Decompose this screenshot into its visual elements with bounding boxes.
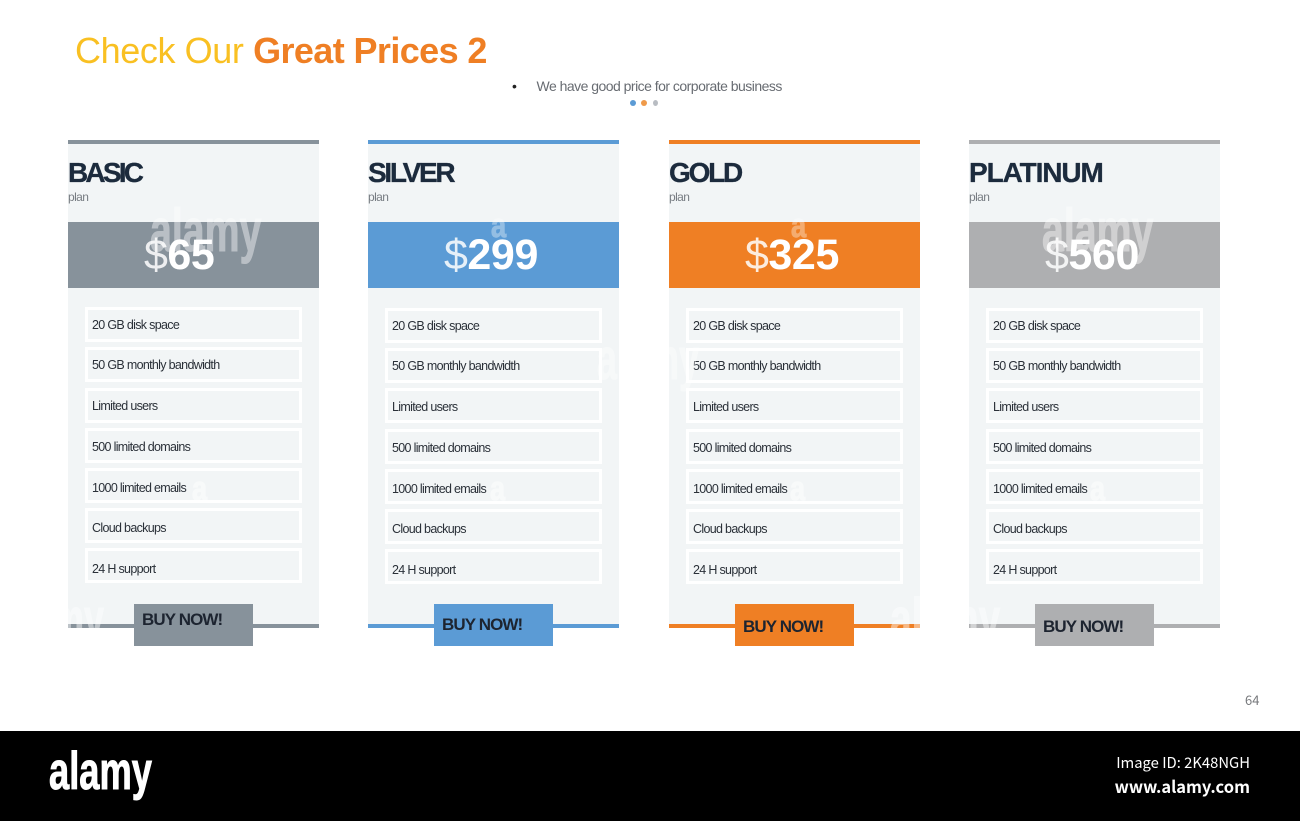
footer bar	[0, 731, 1300, 821]
subtitle bullet text: •	[512, 78, 516, 94]
panel: silver plan: 24 H support	[392, 563, 455, 577]
panel: platinum plan: PLATINUM	[969, 157, 1103, 188]
panel: platinum plan: 500 limited domains	[993, 441, 1091, 455]
panel: silver plan: Limited users	[392, 400, 458, 414]
panel: platinum plan: 50 GB monthly bandwidth	[993, 359, 1120, 373]
panel: basic plan: Cloud backups	[92, 521, 166, 535]
panel: silver plan: Cloud backups	[392, 522, 466, 536]
panel: silver plan: $299	[444, 231, 538, 279]
panel: gold plan: 20 GB disk space	[693, 319, 780, 333]
panel: basic plan: BASIC	[68, 157, 141, 188]
title: Check Our Great Prices 2	[75, 30, 487, 71]
watermark: letters over email rows: a	[192, 470, 207, 508]
watermark: lower right: alamy	[890, 587, 1000, 652]
panel: basic plan: plan	[68, 190, 88, 204]
panel: basic plan: BUY NOW!	[142, 610, 222, 629]
image id: Image ID: 2K48NGH	[1116, 752, 1250, 773]
panel: gold plan: GOLD	[669, 157, 741, 188]
panel: basic plan: alamy	[150, 197, 261, 264]
panel: platinum plan: $560	[1045, 231, 1139, 279]
panel: gold plan: 24 H support	[693, 563, 756, 577]
panel: platinum plan	[969, 140, 1220, 628]
watermark: lower left: alamy	[2, 587, 104, 652]
panel: basic plan	[68, 140, 319, 628]
panel: basic plan: 500 limited domains	[92, 440, 190, 454]
panel: basic plan: 20 GB disk space	[92, 318, 179, 332]
watermark: letters over email rows: a	[790, 470, 805, 508]
watermark: letter on silver band: a	[491, 207, 506, 245]
panel: basic plan: 1000 limited emails	[92, 481, 186, 495]
watermark: centre: alamy	[597, 327, 699, 392]
panel: platinum plan: alamy	[1042, 197, 1153, 264]
watermark: letters over email rows	[190, 472, 1110, 506]
panel: platinum plan: Limited users	[993, 400, 1058, 414]
panel: silver plan	[368, 140, 619, 628]
panel: platinum plan: BUY NOW!	[1043, 617, 1123, 636]
watermark: letter on gold band: a	[791, 207, 806, 245]
panel: platinum plan: 1000 limited emails	[993, 482, 1087, 496]
panel: basic plan: $65	[144, 231, 214, 279]
panel: gold plan: Limited users	[693, 400, 758, 414]
website: www.alamy.com	[1115, 774, 1250, 798]
panel: gold plan: $325	[745, 231, 839, 279]
panel: platinum plan: Cloud backups	[993, 522, 1067, 536]
panel: gold plan: Cloud backups	[693, 522, 767, 536]
watermark: letters over email rows: a	[1090, 470, 1105, 508]
panel: platinum plan: 20 GB disk space	[993, 319, 1080, 333]
panel: platinum plan: plan	[969, 190, 989, 204]
panel: gold plan: 1000 limited emails	[693, 482, 787, 496]
panel: silver plan: 50 GB monthly bandwidth	[392, 359, 520, 373]
panel: basic plan: Limited users	[92, 399, 158, 413]
panel: gold plan: 500 limited domains	[693, 441, 791, 455]
alamy logo: alamy	[49, 742, 152, 801]
watermark: letters over email rows: a	[490, 470, 505, 508]
panel: gold plan: plan	[669, 190, 689, 204]
panel: basic plan: 24 H support	[92, 562, 155, 576]
panel: silver plan: 500 limited domains	[392, 441, 490, 455]
panel: basic plan: 50 GB monthly bandwidth	[92, 358, 220, 372]
panel: silver plan: plan	[368, 190, 388, 204]
panel: silver plan: 20 GB disk space	[392, 319, 479, 333]
panel: silver plan: SILVER	[368, 157, 453, 188]
panel: gold plan: 50 GB monthly bandwidth	[693, 359, 820, 373]
panel: gold plan: BUY NOW!	[743, 617, 823, 636]
panel: silver plan: BUY NOW!	[442, 615, 522, 634]
panel: platinum plan: 24 H support	[993, 563, 1056, 577]
panel: gold plan	[669, 140, 920, 628]
subtitle bullet text: We have good price for corporate business	[536, 78, 782, 94]
page number: 64	[1245, 690, 1259, 709]
decorative dots	[630, 100, 658, 106]
panel: silver plan: 1000 limited emails	[392, 482, 486, 496]
